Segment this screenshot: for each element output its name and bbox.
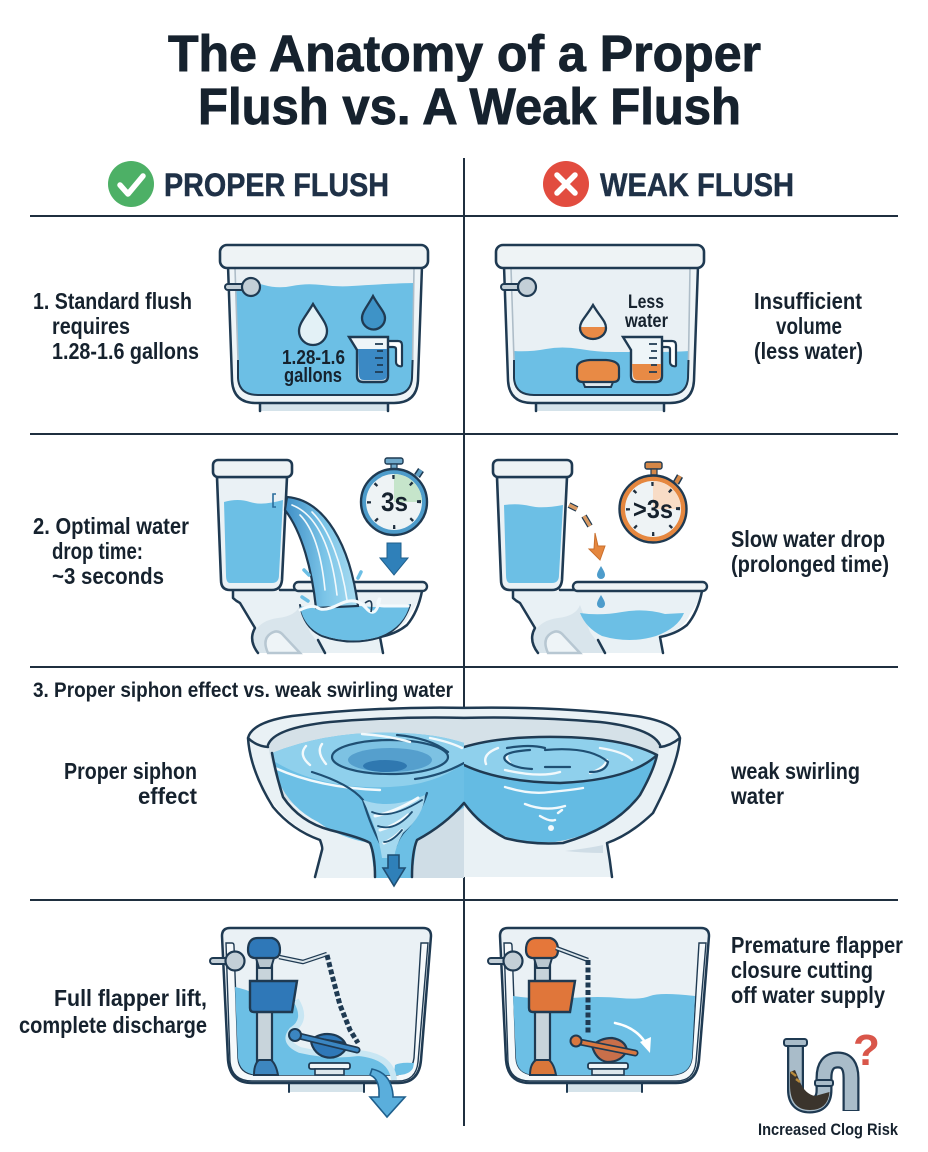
stopwatch 3s: 3s: [381, 487, 408, 517]
arrow down: [380, 543, 408, 575]
flush lever: [504, 278, 536, 296]
row 3 left label: Proper siphon: [64, 758, 197, 784]
bowl rim: [294, 582, 427, 591]
discharge stream: [288, 1000, 394, 1080]
splash: [300, 570, 408, 612]
row 4 left label: [19, 985, 207, 1038]
title: [168, 25, 761, 135]
icon: green check: [108, 161, 154, 207]
row 4 right label: off water supply: [731, 982, 885, 1008]
lever arm: [556, 948, 588, 960]
outlines: [248, 708, 470, 877]
water: [235, 987, 392, 1075]
row 1 right label: (less water): [754, 338, 863, 364]
water drops: [597, 566, 605, 608]
flush lever: [213, 952, 244, 970]
row 2 right label: Slow water drop: [731, 526, 885, 552]
float: [529, 981, 575, 1012]
water stream: [285, 497, 358, 608]
closing arrow: [615, 1023, 651, 1053]
flush lever: [228, 278, 260, 296]
row 1 left label: 1. Standard flush: [33, 288, 192, 314]
stopwatch over 3s: >3s: [633, 494, 673, 524]
icon: blue drop: [362, 296, 385, 329]
discharge arrow: [370, 1069, 405, 1117]
tank: [493, 460, 576, 590]
flush lever: [491, 952, 522, 970]
panel: siphon bowl comparison: [248, 708, 680, 886]
toilet bowl and pedestal: [513, 591, 702, 653]
header: weak flush: [543, 161, 794, 207]
icon: white drop: [299, 304, 327, 345]
icon: clogged pipe: ?: [853, 1026, 880, 1075]
panel: toilet strong flush: [213, 458, 427, 653]
row 4 left label: complete discharge: [19, 1012, 207, 1038]
row 3 left label: effect: [138, 783, 197, 809]
sludge: [790, 1070, 830, 1110]
row 4 right label: closure cutting: [731, 957, 873, 983]
clog risk caption: Increased Clog Risk: [758, 1120, 898, 1139]
fill valve post: [248, 938, 280, 1075]
table grid lines: [30, 158, 898, 1126]
row 2 left label: drop time:: [52, 538, 143, 564]
flapper raised: [289, 1029, 357, 1058]
panel: full tank: [220, 245, 428, 411]
tank lid: [496, 245, 704, 268]
row 3 right label: weak swirling: [730, 758, 860, 784]
icon: red cross: [543, 161, 589, 207]
arrow down: [383, 855, 405, 886]
outlines: [458, 708, 680, 877]
panel: full tank: gallons: [284, 365, 342, 387]
header: weak flush: WEAK FLUSH: [600, 167, 794, 203]
row 2 right label: [731, 526, 889, 577]
water fill: [236, 283, 414, 395]
bowl water: [580, 610, 684, 640]
dashed orange arrow: [569, 505, 605, 560]
panel: low water tank: [496, 245, 704, 411]
stopwatch over 3s: [620, 462, 686, 542]
row 2 left label: ~3 seconds: [52, 563, 164, 589]
panel: full tank: 1.28-1.6: [282, 347, 345, 369]
row 4 left label: Full flapper lift,: [54, 985, 207, 1011]
header: proper flush: [108, 161, 389, 207]
water: [513, 994, 695, 1075]
weak swirl half: [458, 708, 680, 877]
fill valve post: [526, 938, 558, 1075]
panel: premature flapper closure: [491, 928, 709, 1092]
row 4 right label: [731, 932, 903, 1008]
chain: [586, 960, 590, 1035]
row 1 right label: [754, 288, 863, 364]
row 3 right label: [730, 758, 860, 809]
stopwatch 3s: [361, 458, 427, 535]
water: [272, 733, 470, 878]
row 3 right label: water: [730, 783, 784, 809]
row 1 right label: Insufficient: [754, 288, 862, 314]
proper siphon half: [248, 708, 470, 878]
row 4 right label: Premature flapper: [731, 932, 903, 958]
icon: measuring jug: [349, 337, 402, 382]
bowl water: [300, 604, 410, 641]
row 2 left label: [33, 513, 189, 589]
chain: [327, 955, 358, 1043]
panel: toilet slow drop: [493, 460, 707, 653]
panel: low water tank: water: [624, 311, 669, 332]
tank lid: [220, 245, 428, 268]
vortex: [272, 733, 470, 787]
row 2 left label: 2. Optimal water: [33, 513, 189, 539]
tank: [213, 460, 296, 590]
row 3 heading: 3. Proper siphon effect vs. weak swirling water: [33, 679, 453, 702]
flush valve seat: [309, 1063, 350, 1075]
icon: orange flapper float: [577, 360, 619, 387]
title: The Anatomy of a Proper: [168, 25, 761, 82]
lever arm: [279, 954, 327, 962]
title: Flush vs. A Weak Flush: [198, 78, 741, 135]
float: [250, 981, 297, 1012]
row 2 right label: (prolonged time): [731, 551, 889, 577]
icon: measuring jug with little water: [623, 337, 676, 382]
low water fill: [514, 348, 689, 395]
swirl strokes: [485, 748, 632, 820]
row 1 right label: volume: [776, 313, 842, 339]
toilet bowl and pedestal: [233, 591, 422, 653]
funnel twist: [363, 795, 425, 858]
panel: low water tank: Less: [628, 292, 664, 313]
row 1 left label: requires: [52, 313, 130, 339]
water: [464, 758, 655, 842]
flapper closed: [570, 1036, 635, 1062]
icon: clogged pipe: [784, 1026, 880, 1111]
row 1 left label: 1.28-1.6 gallons: [52, 338, 199, 364]
row 3 left label: [64, 758, 197, 809]
panel: full flapper lift: [213, 928, 431, 1117]
header: proper flush: PROPER FLUSH: [164, 167, 389, 203]
icon: part-full drop: [579, 305, 607, 339]
row 1 left label: [33, 288, 199, 364]
bowl rim: [573, 582, 707, 591]
flush valve seat: [588, 1063, 628, 1075]
